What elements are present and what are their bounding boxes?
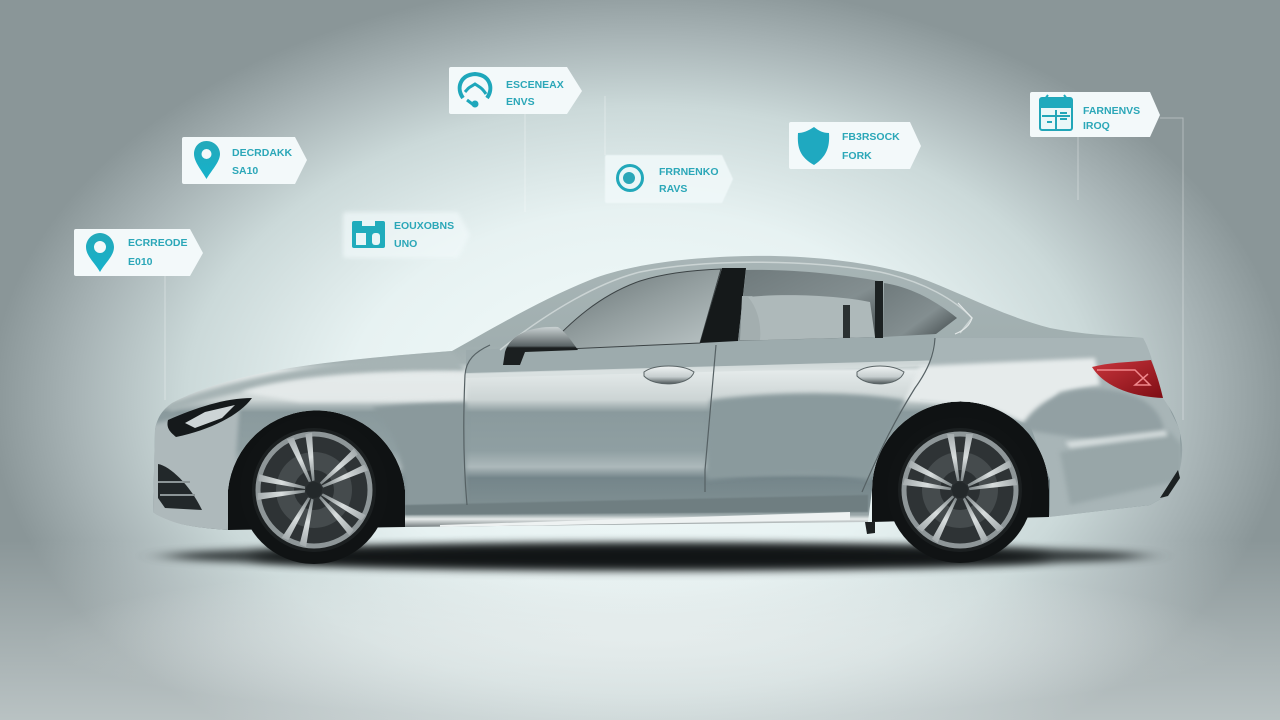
taillight bbox=[1092, 360, 1163, 398]
front fender shading bbox=[372, 402, 466, 508]
text: fb3rsock: FB3RSOCK bbox=[842, 131, 900, 143]
roof rail bbox=[500, 262, 972, 350]
front grille bbox=[158, 464, 202, 510]
connector lines bbox=[165, 96, 1183, 420]
icon: calendar bbox=[1040, 95, 1072, 130]
label: farnenvs bbox=[1030, 92, 1160, 137]
icon: toolbox bbox=[352, 220, 385, 248]
shoulder band bbox=[466, 360, 919, 374]
label: frrnenko: RAVS bbox=[659, 183, 687, 195]
icon: shield bbox=[798, 127, 829, 165]
text: escenex: ESCENEAX bbox=[506, 79, 564, 91]
label: decrdakk: SA10 bbox=[232, 165, 258, 177]
headlight bbox=[167, 398, 252, 437]
mirror bbox=[503, 327, 578, 365]
car body bbox=[140, 250, 1190, 540]
text: eouxobns: EOUXOBNS bbox=[394, 220, 454, 232]
pillar bbox=[700, 268, 746, 343]
label: ecrreodxe bbox=[74, 229, 203, 276]
quarter window bbox=[883, 283, 957, 337]
rear door dark bbox=[706, 393, 905, 480]
label: escenex bbox=[449, 67, 582, 114]
pillar c bbox=[875, 281, 883, 338]
text: decrdakk: DECRDAKK bbox=[232, 147, 292, 159]
label: decrdakk bbox=[182, 137, 307, 184]
label: farnenvs: IROQ bbox=[1083, 120, 1110, 132]
door handles bbox=[644, 366, 904, 384]
icon: location pin bbox=[194, 141, 220, 179]
rear wheel bbox=[887, 417, 1033, 563]
wheel wells bbox=[228, 402, 1049, 530]
front wheel bbox=[240, 416, 388, 564]
door lines bbox=[464, 338, 935, 505]
car bbox=[140, 250, 1190, 564]
rear quarter bbox=[920, 338, 1180, 517]
front window bbox=[545, 269, 721, 350]
icon: headset bbox=[460, 74, 490, 108]
label: eouxobns: UNO bbox=[394, 238, 417, 250]
label: eouxobns bbox=[343, 212, 470, 258]
icon: gauge badge bbox=[618, 166, 642, 190]
ground shadow bbox=[165, 544, 1145, 570]
seat bbox=[740, 296, 768, 340]
label: ecrreodxe: E010 bbox=[128, 256, 153, 268]
text: farnenvs: FARNENVS bbox=[1083, 105, 1140, 117]
text: frrnenko: FRRNENKO bbox=[659, 166, 718, 178]
label: fb3rsock bbox=[789, 122, 921, 169]
rear diffuser bbox=[1160, 470, 1180, 498]
front bumper shading bbox=[153, 410, 240, 530]
label: frrnenko bbox=[605, 155, 733, 203]
hood shading bbox=[170, 364, 466, 411]
label: escenex: ENVS bbox=[506, 96, 535, 108]
text: ecrreodxe: ECRREODE bbox=[128, 237, 188, 249]
mud flap bbox=[865, 522, 875, 534]
label: fb3rsock: FORK bbox=[842, 150, 872, 162]
icon: location pin bbox=[86, 233, 114, 272]
rear window bbox=[738, 270, 879, 341]
sill bbox=[405, 495, 868, 515]
